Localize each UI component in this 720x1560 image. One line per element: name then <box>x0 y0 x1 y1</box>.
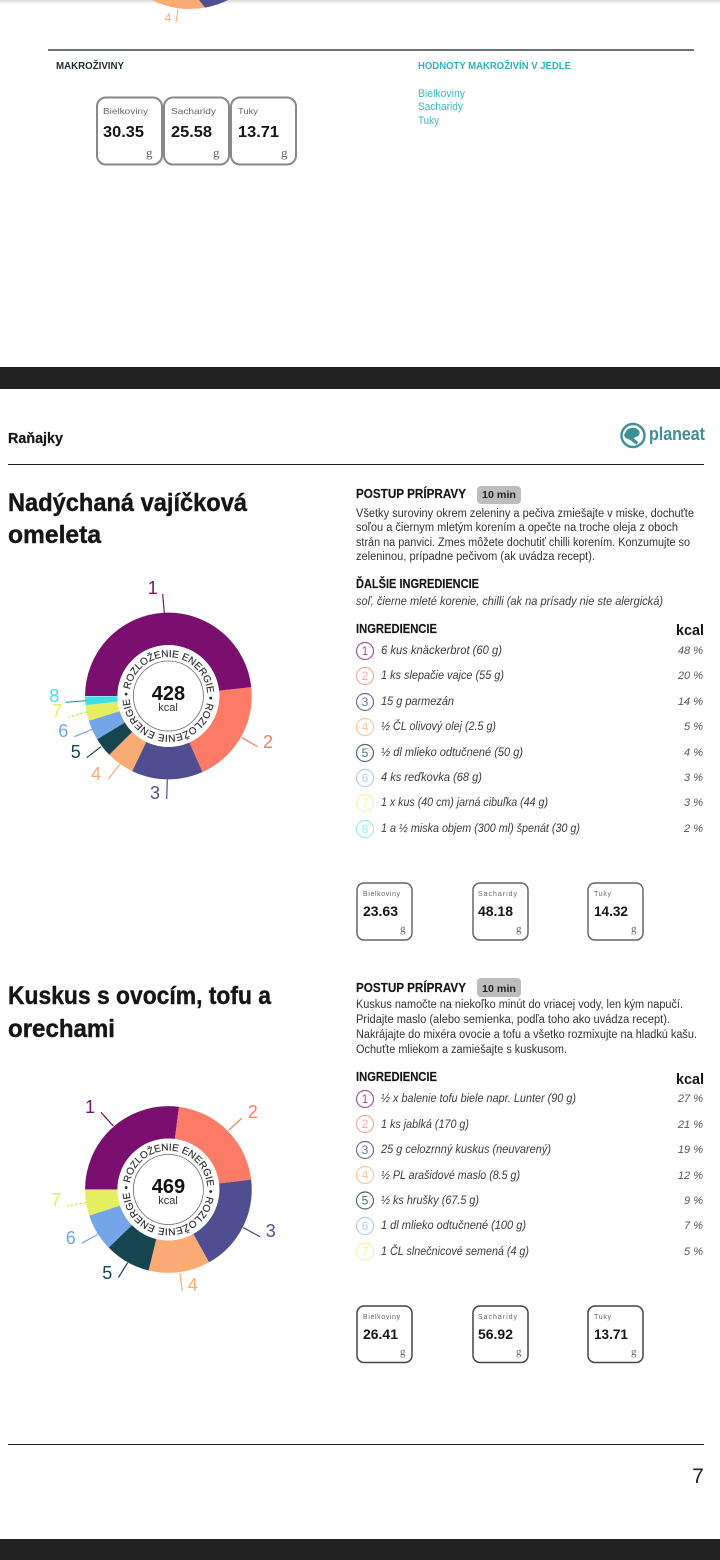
macro box: bielkoviny <box>357 883 412 940</box>
time badge <box>477 978 521 997</box>
callout labels: 6 <box>58 721 68 741</box>
callout labels: 6 <box>66 1228 76 1248</box>
ingredient row 3: 15 g parmezán <box>381 696 454 708</box>
ingredient row 5: 5 <box>362 1194 369 1208</box>
previous page: cropped donut chart <box>152 0 228 25</box>
ingredient row 4: 4 <box>362 720 369 734</box>
macro legend: Bielkoviny <box>418 88 465 100</box>
ingredient row 7: 5 % <box>684 1246 703 1258</box>
macro box: tuky <box>588 883 643 940</box>
ingredient row 3 <box>356 694 703 710</box>
callout labels: 2 <box>263 732 273 752</box>
ingredient row 1: ½ x balenie tofu biele napr. Lunter (90 g) <box>381 1093 576 1105</box>
ingredient row 4: 5 % <box>684 721 703 733</box>
macro box: tuky <box>588 1306 643 1362</box>
macro box: sacharidy: 56.92 <box>478 1326 513 1342</box>
ingredient row 2: 1 ks jablká (170 g) <box>381 1119 469 1131</box>
ingredient row 4 <box>356 718 703 736</box>
ingredient row 3: 14 % <box>678 696 703 708</box>
recipe 2 macro boxes <box>357 1306 643 1362</box>
macro box: tuky: g <box>631 1346 637 1358</box>
macro box: bielkoviny: 23.63 <box>363 903 398 919</box>
preparation text: zeleninou, prípadne pečivom (ak uvádza recept). <box>356 551 595 563</box>
macro box: tuky: Tuky <box>594 1314 612 1321</box>
callout labels: 4 <box>188 1275 198 1295</box>
preparation text <box>356 999 697 1056</box>
preparation text: Všetky suroviny okrem zeleniny a pečiva zmiešajte v miske, dochuťte <box>356 508 694 520</box>
macro box: tuky <box>231 98 296 164</box>
callout labels: 7 <box>52 701 62 721</box>
ingredient row 1: 48 % <box>678 645 703 657</box>
macro box: sacharidy <box>473 883 528 940</box>
ingredient row 7: 7 <box>362 796 369 810</box>
logo: planeat: planeat <box>649 424 705 444</box>
page header <box>8 424 705 464</box>
donut chart: recipe 1 energy distribution: 428 <box>152 683 185 705</box>
macro box: sacharidy: g <box>516 923 522 935</box>
section title: raňajky: Raňajky <box>8 431 63 447</box>
ingredient row 3: 3 <box>362 695 369 709</box>
macro box: tuky: Tuky <box>238 107 258 116</box>
macro legend: Sacharidy <box>418 101 463 113</box>
macro box: bielkoviny: 26.41 <box>363 1326 398 1342</box>
ingredient row 5: 5 <box>362 746 369 760</box>
ingredient row 8: 2 % <box>683 823 703 835</box>
ingredient row 5: ½ dl mlieko odtučnené (50 g) <box>381 747 523 759</box>
donut chart: recipe 1 energy distribution: • ROZLOŽENIE ENERGIE • ROZLOŽENIE ENERGIE <box>122 650 214 742</box>
ingredient row 7: 1 ČL slnečnicové semená (4 g) <box>381 1245 529 1258</box>
heading: makroživiny: MAKROŽIVINY <box>56 59 124 72</box>
ingredient row 3: 25 g celozrnný kuskus (neuvarený) <box>380 1144 551 1156</box>
previous page: cropped donut chart: 4 <box>165 11 172 25</box>
ingredient table header <box>356 1070 704 1088</box>
recipe 1 ingredient list <box>356 622 704 838</box>
dark page separator bottom <box>0 1539 720 1560</box>
ingredient row 7 <box>356 794 703 812</box>
ingredient table header: kcal <box>676 622 704 639</box>
callout labels: 1 <box>85 1097 95 1117</box>
dark page separator top <box>0 367 720 389</box>
macro box: tuky: 13.71 <box>238 124 279 141</box>
ingredient row 2 <box>356 1116 703 1132</box>
ingredient row 1: 1 <box>362 644 369 658</box>
time badge: 10 min <box>482 984 516 995</box>
macro box: sacharidy <box>473 1306 528 1362</box>
ingredient row 5 <box>356 1192 703 1209</box>
callout labels: 5 <box>102 1263 112 1283</box>
ingredient row 7: 3 % <box>684 797 703 809</box>
callout labels: 4 <box>91 764 101 784</box>
ingredient row 1 <box>356 642 703 660</box>
macro box: sacharidy: Sacharidy <box>171 107 216 116</box>
time badge: 10 min <box>482 490 516 501</box>
ingredient row 1 <box>356 1090 703 1108</box>
recipe 2 title: Kuskus s ovocím, tofu a <box>8 982 272 1010</box>
ingredient row 7 <box>356 1243 703 1260</box>
macro box: tuky: 14.32 <box>594 903 628 919</box>
macro box: tuky: Tuky <box>594 891 612 898</box>
heading: hodnoty makroživín: HODNOTY MAKROŽIVÍN V JEDLE <box>418 59 571 72</box>
callout labels: 3 <box>266 1221 276 1241</box>
heading: postup prípravy: POSTUP PRÍPRAVY <box>356 486 467 501</box>
preparation text: Ochuťte mliekom a zamiešajte s kuskusom. <box>356 1044 567 1056</box>
ingredient row 2: 2 <box>362 1117 369 1131</box>
ingredient row 4: ½ ČL olivový olej (2.5 g) <box>381 720 496 733</box>
ingredient table header: INGREDIENCIE <box>356 622 437 636</box>
ingredient row 6 <box>356 770 703 786</box>
recipe 1 title: Nadýchaná vajíčková <box>8 489 247 517</box>
ingredient row 4: 12 % <box>678 1170 703 1182</box>
macro box: tuky: g <box>631 923 637 935</box>
macro box: bielkoviny <box>357 1306 412 1362</box>
callout labels: 2 <box>248 1102 258 1122</box>
recipe 2 ingredient list <box>356 1070 704 1260</box>
ingredient row 8: 8 <box>362 822 369 836</box>
previous page: macronutrient section <box>48 50 694 164</box>
ingredient table header: kcal <box>676 1071 704 1088</box>
ingredient row 6: 4 ks reďkovka (68 g) <box>381 772 482 784</box>
macro box: sacharidy <box>164 98 229 164</box>
macro legend: Tuky <box>418 115 439 127</box>
macro box: bielkoviny: g <box>146 145 153 160</box>
ingredient row 2: 2 <box>362 669 369 683</box>
recipe 1 title: omeleta <box>8 521 102 549</box>
ingredient row 5: 9 % <box>684 1195 703 1207</box>
preparation text: Pridajte maslo (alebo semienka, podľa toho ako uvádza recept). <box>356 1014 670 1026</box>
recipe 1 title <box>8 489 247 549</box>
donut chart: recipe 2 energy distribution: • ROZLOŽENIE ENERGIE • ROZLOŽENIE ENERGIE <box>122 1143 214 1236</box>
macro box: sacharidy: g <box>213 145 220 160</box>
macro legend <box>418 88 465 127</box>
macro box: bielkoviny: g <box>400 1346 406 1358</box>
preparation text <box>356 508 694 563</box>
ingredient row 4: 4 <box>362 1168 369 1182</box>
macro box: sacharidy: 48.18 <box>478 903 513 919</box>
ingredient row 1: 27 % <box>677 1093 703 1105</box>
ingredient row 6 <box>356 1218 703 1234</box>
ingredient row 3 <box>356 1142 703 1158</box>
ingredient row 1: 1 <box>362 1092 369 1106</box>
preparation text: Nakrájajte do mixéra ovocie a tofu a všetko rozmixujte na hladkú kašu. <box>356 1029 697 1041</box>
macro box: sacharidy: 25.58 <box>171 124 212 141</box>
heading: postup prípravy: POSTUP PRÍPRAVY <box>356 980 467 995</box>
macro box: tuky: 13.71 <box>594 1326 628 1342</box>
recipe 1 preparation <box>356 486 694 563</box>
ingredient row 2 <box>356 668 703 684</box>
preparation text: Kuskus namočte na niekoľko minút do vriacej vody, len kým napučí. <box>356 999 683 1011</box>
callout labels: 1 <box>148 578 158 598</box>
ingredient row 3: 19 % <box>678 1144 703 1156</box>
donut chart: recipe 2 energy distribution: 469 <box>152 1176 185 1198</box>
ingredient row 5: 4 % <box>684 747 703 759</box>
macro box: bielkoviny <box>97 98 162 164</box>
recipe 2 title: orechami <box>8 1015 115 1043</box>
ingredient table header <box>356 622 704 639</box>
ingredient row 6: 7 % <box>684 1220 703 1232</box>
donut chart: recipe 1 energy distribution: kcal <box>158 702 178 714</box>
ingredient row 5: ½ ks hrušky (67.5 g) <box>381 1195 479 1207</box>
ingredient row 7: 7 <box>362 1244 369 1258</box>
recipe 1 extra ingredients <box>356 576 663 608</box>
ingredient row 2: 1 ks slepačie vajce (55 g) <box>381 670 504 682</box>
preparation text: strán na panvici. Zmes môžete dochutiť chilli korením. Konzumujte so <box>356 537 690 549</box>
macro box: sacharidy: g <box>516 1346 522 1358</box>
macro box: sacharidy: Sacharidy <box>478 1314 518 1321</box>
donut chart: recipe 2 energy distribution <box>51 1097 276 1295</box>
macro box: bielkoviny: g <box>400 923 406 935</box>
logo: planeat <box>622 424 705 447</box>
ingredient row 8 <box>356 820 703 838</box>
ingredient row 5 <box>356 744 703 762</box>
macro box: sacharidy: Sacharidy <box>478 891 518 898</box>
recipe 2 preparation <box>356 978 697 1056</box>
macro box: bielkoviny: 30.35 <box>103 124 144 141</box>
ingredient row 6: 1 dl mlieko odtučnené (100 g) <box>381 1220 526 1232</box>
donut chart: recipe 1 energy distribution <box>49 578 273 803</box>
ingredient row 4: ½ PL arašidové maslo (8.5 g) <box>381 1170 520 1182</box>
ingredient row 7: 1 x kus (40 cm) jarná cibuľka (44 g) <box>381 797 548 809</box>
recipe 1 macro boxes <box>357 883 643 940</box>
donut chart: recipe 2 energy distribution: kcal <box>158 1195 178 1207</box>
macro box: bielkoviny: Bielkoviny <box>363 1314 400 1321</box>
ingredient row 4 <box>356 1166 703 1184</box>
callout labels: 3 <box>150 783 160 803</box>
preparation text: soľou a čiernym mletým korením a opečte na troche oleja z oboch <box>356 522 678 534</box>
ingredient table header: INGREDIENCIE <box>356 1070 437 1084</box>
ingredient row 2: 20 % <box>677 670 703 682</box>
ingredient row 8: 1 a ½ miska objem (300 ml) špenát (30 g) <box>381 823 580 835</box>
callout labels <box>51 1097 276 1295</box>
macro box: bielkoviny: Bielkoviny <box>103 107 148 116</box>
ingredient row 6: 6 <box>362 771 369 785</box>
callout labels: 7 <box>51 1190 61 1210</box>
recipe 2 title <box>8 982 272 1043</box>
recipe 1 extra ingredients: soľ, čierne mleté korenie, chilli (ak na prísady nie ste alergická) <box>356 596 663 608</box>
page number: 7 <box>692 1465 704 1488</box>
callout labels: 5 <box>71 742 81 762</box>
ingredient row 6: 3 % <box>684 772 703 784</box>
recipe 1 extra ingredients: ĎALŠIE INGREDIENCIE <box>356 576 479 591</box>
ingredient row 3: 3 <box>362 1143 369 1157</box>
ingredient row 2: 21 % <box>677 1119 703 1131</box>
ingredient row 1: 6 kus knäckerbrot (60 g) <box>381 645 502 657</box>
callout labels: 8 <box>49 686 59 706</box>
ingredient row 6: 6 <box>362 1219 369 1233</box>
macro box: tuky: g <box>281 145 288 160</box>
time badge <box>477 486 521 504</box>
macro box: bielkoviny: Bielkoviny <box>363 891 400 898</box>
callout labels <box>49 578 273 803</box>
